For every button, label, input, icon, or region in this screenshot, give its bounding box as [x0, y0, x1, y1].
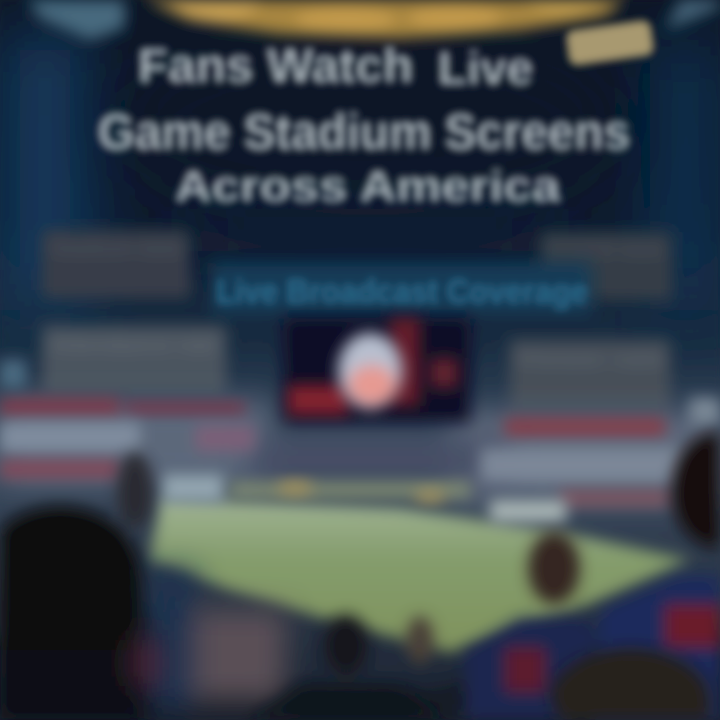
text block: lower left: [42, 326, 226, 394]
text block: upper left: Stadium data: [50, 235, 183, 260]
subtitle in blue: [212, 262, 592, 314]
spectator far right: [590, 432, 720, 720]
head bottom right: [550, 648, 710, 720]
text block: upper left: [42, 230, 190, 298]
text block: lower right: [510, 340, 670, 410]
subtitle in blue: Live Broadcast Coverage: [216, 273, 588, 311]
crowd base: [0, 610, 720, 720]
text block: lower right: Viewer rate: [516, 346, 664, 371]
large head left: [0, 452, 153, 720]
title line 3: Across America: [175, 162, 561, 211]
title badge: [566, 20, 654, 66]
foreground crowd silhouettes: [0, 432, 720, 720]
stands: crowd bands: [0, 360, 720, 506]
small head centre: [250, 615, 445, 720]
stadium roof lights: [28, 0, 720, 40]
center screen with badge: [284, 318, 470, 422]
title line 1: Fans Watch: [138, 40, 413, 93]
text block: upper right: [540, 232, 672, 300]
spectator centre right: [465, 532, 600, 720]
title: [98, 20, 654, 211]
field: [150, 474, 690, 652]
text block: upper right: Crowd data: [548, 236, 665, 261]
text block: lower left: Attendance rate: [50, 332, 218, 357]
icon: shield badge: [338, 333, 402, 409]
title line 1 end: Live: [438, 42, 533, 94]
spectator jersey left: [130, 570, 285, 710]
screen red glow: [288, 318, 458, 415]
title line 2: Game Stadium Screens: [98, 104, 630, 160]
